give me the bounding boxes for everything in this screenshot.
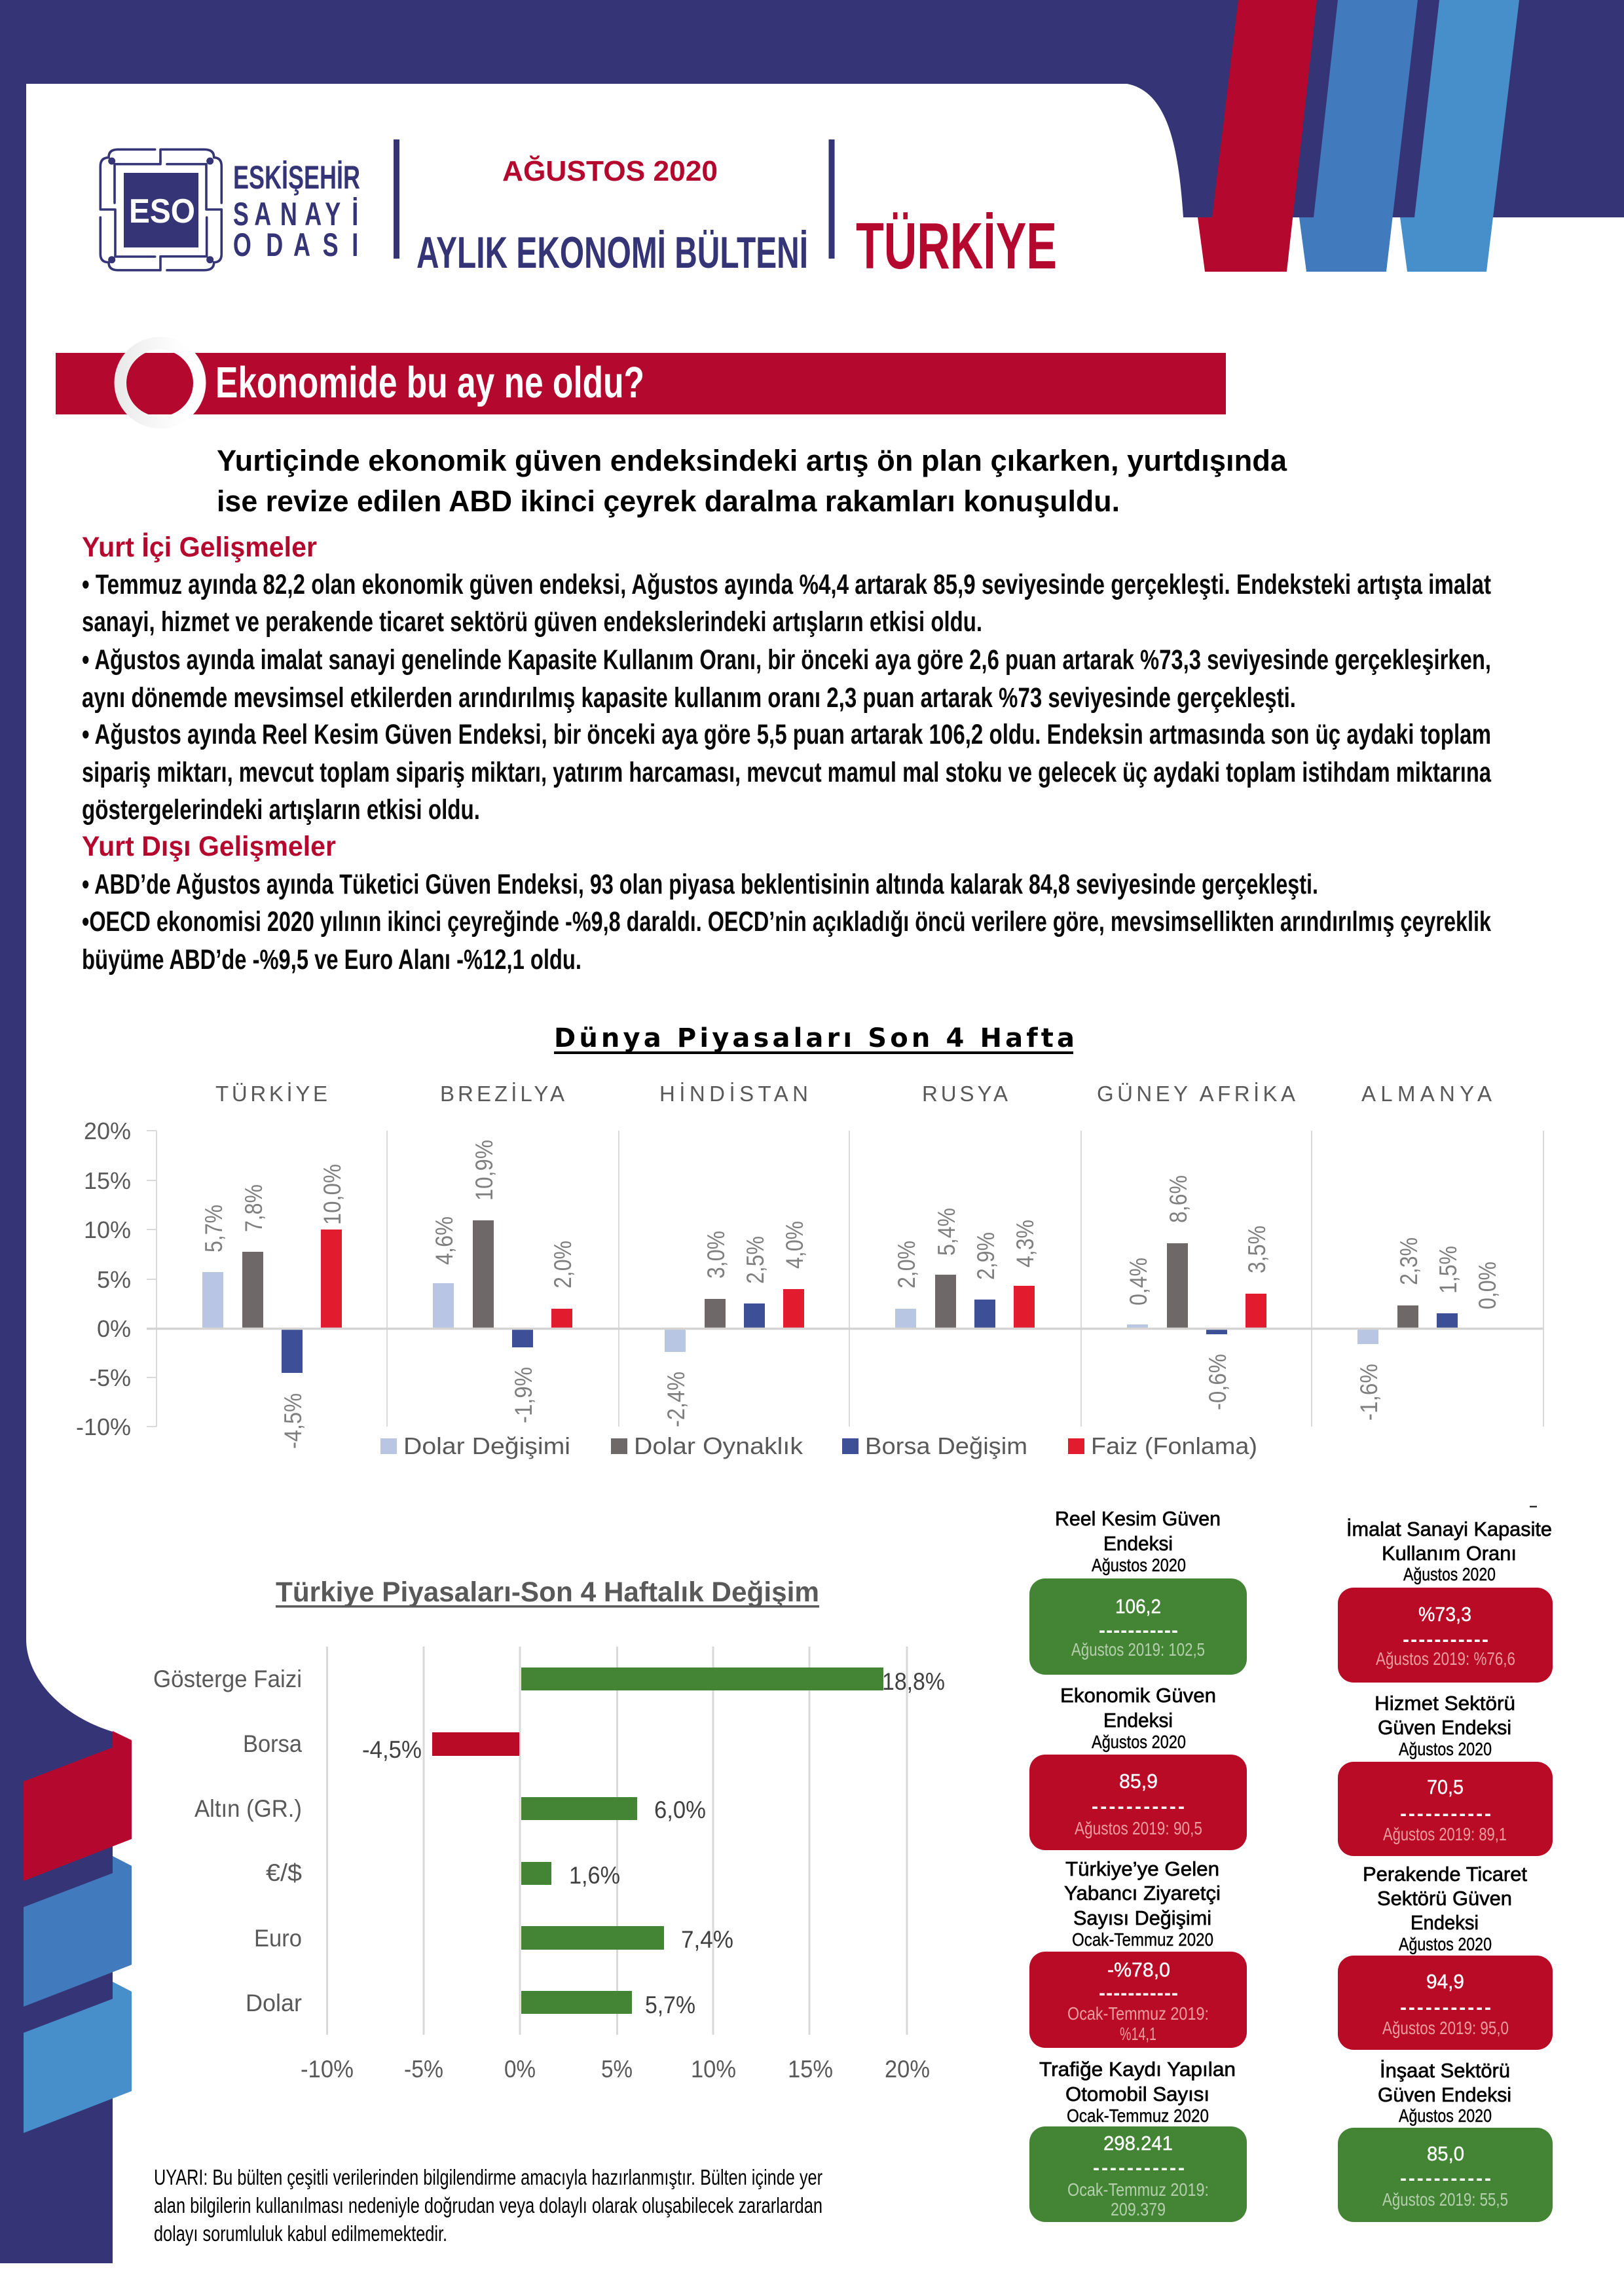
card: Trafiğe Kaydı Yapılan Otomobil Sayısı: Otomobil Sayısı <box>1065 2083 1209 2105</box>
card: Reel Kesim Güven Endeksi: 106,2 <box>1115 1595 1161 1618</box>
card: Perakende Ticaret Sektörü Güven Endeksi: Sektörü Güven <box>1377 1887 1512 1910</box>
category labels: Borsa <box>243 1730 302 1757</box>
chart legend <box>380 1432 1257 1459</box>
category labels: Altın (GR.) <box>194 1795 302 1822</box>
card: İmalat Sanayi Kapasite Kullanım Oranı: İmalat Sanayi Kapasite <box>1346 1518 1552 1540</box>
text block: domestic developments: göstergelerindeki artışların etkisi oldu. <box>82 794 480 826</box>
chart title: Türkiye Piyasaları-Son 4 Haftalık Değişim <box>276 1576 819 1608</box>
bars: Faiz (Fonlama) <box>321 1230 1266 1328</box>
category labels: Gösterge Faizi <box>153 1666 302 1692</box>
card: Perakende Ticaret Sektörü Güven Endeksi: Ağustos 2020 <box>1399 1934 1492 1954</box>
value labels: 7,4% <box>681 1926 733 1953</box>
y axis labels: 20% <box>84 1118 131 1144</box>
card: Türkiye'ye Gelen Yabancı Ziyaretçi Sayısı Değişimi: Sayısı Değişimi <box>1073 1906 1211 1929</box>
logo: ESO emblem: ESO <box>129 192 195 230</box>
text block: foreign developments: Yurt Dışı Gelişmeler <box>82 831 336 862</box>
disclaimer: UYARI: Bu bülten çeşitli verilerinden bilgilendirme amacıyla hazırlanmıştır. Bülten içinde yer <box>154 2165 822 2189</box>
card: Türkiye'ye Gelen Yabancı Ziyaretçi Sayısı Değişimi: %14,1 <box>1120 2024 1156 2044</box>
data labels: -0,6% <box>1204 1354 1231 1410</box>
chart: Turkey markets last 4 weeks change <box>153 1576 945 2083</box>
card: İnşaat Sektörü Güven Endeksi: Ağustos 2019: 55,5 <box>1382 2189 1508 2210</box>
card: İmalat Sanayi Kapasite Kullanım Oranı: Ağustos 2019: %76,6 <box>1376 1649 1515 1669</box>
card: Ekonomik Güven Endeksi: Endeksi <box>1103 1709 1173 1732</box>
category labels: Dolar <box>246 1990 302 2016</box>
data labels: 4,3% <box>1012 1220 1039 1267</box>
text block: domestic developments: sanayi, hizmet ve perakende ticaret sektörü güven endekslerindeki artışların etkisi oldu. <box>82 606 982 638</box>
card: Reel Kesim Güven Endeksi <box>1029 1507 1247 1675</box>
data labels <box>200 1140 1501 1449</box>
card: Trafiğe Kaydı Yapılan Otomobil Sayısı: Ocak-Temmuz 2019: <box>1067 2179 1209 2200</box>
data labels: 3,5% <box>1244 1226 1270 1273</box>
chart: world markets last 4 weeks <box>76 1023 1543 1459</box>
data labels: -2,4% <box>663 1372 690 1427</box>
y axis labels: 15% <box>84 1167 131 1194</box>
data labels: -1,6% <box>1356 1364 1382 1421</box>
chart legend: Dolar Oynaklık <box>634 1432 803 1459</box>
card: Trafiğe Kaydı Yapılan Otomobil Sayısı: ----------- <box>1093 2157 1185 2179</box>
card: Reel Kesim Güven Endeksi: Endeksi <box>1103 1532 1173 1555</box>
bars: Dolar Oynaklık <box>242 1220 1418 1328</box>
card: Türkiye'ye Gelen Yabancı Ziyaretçi Sayısı Değişimi: Ocak-Temmuz 2020 <box>1072 1929 1213 1950</box>
card: İnşaat Sektörü Güven Endeksi: 85,0 <box>1427 2142 1464 2165</box>
card: İnşaat Sektörü Güven Endeksi <box>1338 2059 1553 2222</box>
text block: foreign developments: büyüme ABD’de -%9,5 ve Euro Alanı -%12,1 oldu. <box>82 944 581 975</box>
card: Ekonomik Güven Endeksi: ----------- <box>1092 1796 1185 1817</box>
date heading: AĞUSTOS 2020 <box>502 155 718 187</box>
x axis labels: 10% <box>691 2056 736 2083</box>
card: Ekonomik Güven Endeksi <box>1029 1684 1247 1850</box>
headline summary: ise revize edilen ABD ikinci çeyrek daralma rakamları konuşuldu. <box>217 484 1120 518</box>
card: Perakende Ticaret Sektörü Güven Endeksi: 94,9 <box>1426 1970 1464 1993</box>
chart legend: Faiz (Fonlama) <box>1091 1432 1257 1459</box>
card: İmalat Sanayi Kapasite Kullanım Oranı: ----------- <box>1403 1629 1488 1650</box>
text block: domestic developments <box>82 532 1492 826</box>
card: Reel Kesim Güven Endeksi: ----------- <box>1099 1620 1178 1641</box>
data labels: 2,3% <box>1395 1237 1422 1285</box>
card: İmalat Sanayi Kapasite Kullanım Oranı: Kullanım Oranı <box>1382 1542 1517 1565</box>
data labels: 7,8% <box>240 1184 267 1232</box>
card: Trafiğe Kaydı Yapılan Otomobil Sayısı <box>1029 2058 1247 2222</box>
data labels: 10,9% <box>471 1140 498 1201</box>
card: Perakende Ticaret Sektörü Güven Endeksi: Perakende Ticaret <box>1363 1863 1527 1886</box>
disclaimer: dolayı sorumluluk kabul edilmemektedir. <box>154 2221 447 2246</box>
data labels: 5,4% <box>933 1208 960 1256</box>
y axis labels: -5% <box>89 1364 131 1391</box>
section banner <box>56 337 1226 428</box>
card: Reel Kesim Güven Endeksi: Reel Kesim Güven <box>1055 1507 1221 1530</box>
data labels: 2,0% <box>893 1241 920 1288</box>
country labels: RUSYA <box>922 1082 1008 1106</box>
card: Trafiğe Kaydı Yapılan Otomobil Sayısı: Ocak-Temmuz 2020 <box>1067 2105 1209 2126</box>
card: Ekonomik Güven Endeksi: Ekonomik Güven <box>1060 1684 1216 1707</box>
text block: domestic developments: aynı dönemde mevsimsel etkilerden arındırılmış kapasite kullanım oranı 2,3 puan artarak %73 seviyesinde gerçekleşti. <box>82 682 1296 714</box>
data labels: 0,4% <box>1125 1258 1152 1305</box>
card: Ekonomik Güven Endeksi: Ağustos 2020 <box>1092 1732 1186 1752</box>
logo: organisation name: ESKİŞEHİR <box>233 159 360 196</box>
x axis labels: -5% <box>404 2056 443 2083</box>
x axis labels: 0% <box>504 2056 536 2083</box>
card: Trafiğe Kaydı Yapılan Otomobil Sayısı: Trafiğe Kaydı Yapılan <box>1039 2058 1236 2081</box>
category labels: Euro <box>254 1925 302 1952</box>
disclaimer: alan bilgilerin kullanılması nedeniyle doğrudan veya dolaylı olarak oluşabilecek zararlardan <box>154 2193 822 2217</box>
card: İnşaat Sektörü Güven Endeksi: ----------- <box>1400 2168 1491 2189</box>
card: Hizmet Sektörü Güven Endeksi: 70,5 <box>1427 1776 1464 1798</box>
card: Perakende Ticaret Sektörü Güven Endeksi: ----------- <box>1400 1997 1491 2018</box>
card: Reel Kesim Güven Endeksi: Ağustos 2020 <box>1092 1555 1186 1575</box>
y axis labels: 5% <box>97 1266 131 1293</box>
horizontal bars <box>432 1667 883 2014</box>
bars: Borsa Değişim <box>282 1300 1458 1373</box>
card: İnşaat Sektörü Güven Endeksi: Ağustos 2020 <box>1399 2105 1492 2126</box>
data labels: 8,6% <box>1165 1175 1192 1223</box>
bulletin title: AYLIK EKONOMİ BÜLTENİ <box>416 228 808 278</box>
text block: domestic developments: Yurt İçi Gelişmeler <box>82 532 317 563</box>
card: Türkiye'ye Gelen Yabancı Ziyaretçi Sayısı Değişimi: Yabancı Ziyaretçi <box>1064 1882 1221 1904</box>
card: İmalat Sanayi Kapasite Kullanım Oranı: %73,3 <box>1418 1603 1471 1626</box>
logo: organisation name: ODASI <box>233 227 358 263</box>
decorative stripes: left side <box>24 1731 132 2133</box>
divider: left vertical <box>394 139 399 259</box>
card: İnşaat Sektörü Güven Endeksi: Güven Endeksi <box>1378 2083 1511 2106</box>
data labels: 5,7% <box>200 1205 227 1252</box>
x axis labels <box>301 2056 930 2083</box>
data labels: 0,0% <box>1474 1262 1501 1309</box>
card: Türkiye'ye Gelen Yabancı Ziyaretçi Sayısı Değişimi <box>1029 1857 1247 2048</box>
value labels: -4,5% <box>362 1736 422 1763</box>
data labels: 10,0% <box>319 1164 346 1225</box>
value labels: 6,0% <box>654 1796 706 1823</box>
card: Perakende Ticaret Sektörü Güven Endeksi <box>1338 1863 1553 2050</box>
data labels: 2,5% <box>742 1236 769 1284</box>
chart legend: Borsa Değişim <box>865 1432 1027 1459</box>
card: İnşaat Sektörü Güven Endeksi: İnşaat Sektörü <box>1380 2059 1510 2082</box>
card: Trafiğe Kaydı Yapılan Otomobil Sayısı: 209.379 <box>1111 2199 1166 2219</box>
logo: organisation name <box>233 159 360 263</box>
data labels: 2,9% <box>972 1232 999 1280</box>
x axis labels: 5% <box>601 2056 633 2083</box>
y axis labels <box>76 1118 131 1440</box>
value labels: 18,8% <box>882 1668 945 1695</box>
y axis labels: 0% <box>97 1315 131 1342</box>
category labels: €/$ <box>266 1859 302 1886</box>
country labels: TÜRKİYE <box>215 1082 327 1106</box>
logo: organisation name: SANAYİ <box>233 196 358 232</box>
y axis labels: 10% <box>84 1216 131 1243</box>
card: İmalat Sanayi Kapasite Kullanım Oranı <box>1338 1506 1553 1683</box>
card: Hizmet Sektörü Güven Endeksi: Ağustos 2020 <box>1399 1739 1492 1759</box>
value labels: 5,7% <box>645 1992 695 2018</box>
x axis labels: 20% <box>885 2056 930 2083</box>
card: Hizmet Sektörü Güven Endeksi: Ağustos 2019: 89,1 <box>1383 1824 1507 1844</box>
disclaimer <box>154 2165 822 2246</box>
card: Hizmet Sektörü Güven Endeksi <box>1338 1692 1553 1856</box>
card: Ekonomik Güven Endeksi: Ağustos 2019: 90,5 <box>1075 1818 1202 1838</box>
card: Türkiye'ye Gelen Yabancı Ziyaretçi Sayısı Değişimi: Türkiye’ye Gelen <box>1065 1857 1219 1880</box>
headline summary <box>217 444 1287 518</box>
value labels <box>362 1668 945 2018</box>
card: Reel Kesim Güven Endeksi: Ağustos 2019: 102,5 <box>1071 1639 1205 1660</box>
section banner: Ekonomide bu ay ne oldu? <box>215 358 644 407</box>
card: Türkiye'ye Gelen Yabancı Ziyaretçi Sayısı Değişimi: -%78,0 <box>1107 1958 1170 1981</box>
country labels: GÜNEY AFRİKA <box>1097 1082 1295 1106</box>
y axis labels: -10% <box>76 1413 131 1440</box>
data labels: -1,9% <box>510 1367 537 1423</box>
data labels: 3,0% <box>703 1231 729 1279</box>
data labels: 1,5% <box>1435 1246 1462 1294</box>
headline summary: Yurtiçinde ekonomik güven endeksindeki artış ön plan çıkarken, yurtdışında <box>217 444 1287 477</box>
card: Hizmet Sektörü Güven Endeksi: ----------- <box>1400 1803 1491 1825</box>
text block: foreign developments <box>82 831 1491 975</box>
card: Ekonomik Güven Endeksi: 85,9 <box>1119 1770 1158 1793</box>
data labels: 4,6% <box>431 1216 458 1265</box>
country labels: ALMANYA <box>1361 1082 1492 1106</box>
chart title: Dünya Piyasaları Son 4 Hafta <box>554 1023 1075 1053</box>
data labels: -4,5% <box>280 1393 306 1449</box>
value labels: 1,6% <box>569 1862 620 1889</box>
logo: ESO emblem <box>100 149 221 270</box>
data labels: 4,0% <box>781 1221 808 1269</box>
card: Perakende Ticaret Sektörü Güven Endeksi: Ağustos 2019: 95,0 <box>1382 2018 1509 2038</box>
country labels: BREZİLYA <box>440 1082 564 1106</box>
card: Hizmet Sektörü Güven Endeksi: Hizmet Sektörü <box>1375 1692 1515 1715</box>
card: Türkiye'ye Gelen Yabancı Ziyaretçi Sayısı Değişimi: Ocak-Temmuz 2019: <box>1067 2003 1209 2024</box>
card: Trafiğe Kaydı Yapılan Otomobil Sayısı: 298.241 <box>1103 2132 1173 2155</box>
chart legend: Dolar Değişimi <box>403 1432 570 1459</box>
divider: right vertical <box>829 139 834 259</box>
x axis labels: 15% <box>788 2056 833 2083</box>
data labels: 2,0% <box>549 1241 576 1288</box>
country labels <box>215 1082 1492 1106</box>
decorative stripes: top right <box>1198 0 1519 272</box>
category labels <box>153 1666 302 2016</box>
card: Hizmet Sektörü Güven Endeksi: Güven Endeksi <box>1378 1716 1511 1739</box>
x axis labels: -10% <box>301 2056 354 2083</box>
card: Perakende Ticaret Sektörü Güven Endeksi: Endeksi <box>1411 1911 1479 1934</box>
card: Türkiye'ye Gelen Yabancı Ziyaretçi Sayısı Değişimi: ----------- <box>1099 1982 1178 2004</box>
bars: Dolar Değişimi <box>202 1272 1378 1352</box>
card: İmalat Sanayi Kapasite Kullanım Oranı: Ağustos 2020 <box>1403 1564 1496 1584</box>
country heading: TÜRKİYE <box>856 210 1057 283</box>
country labels: HİNDİSTAN <box>659 1082 808 1106</box>
